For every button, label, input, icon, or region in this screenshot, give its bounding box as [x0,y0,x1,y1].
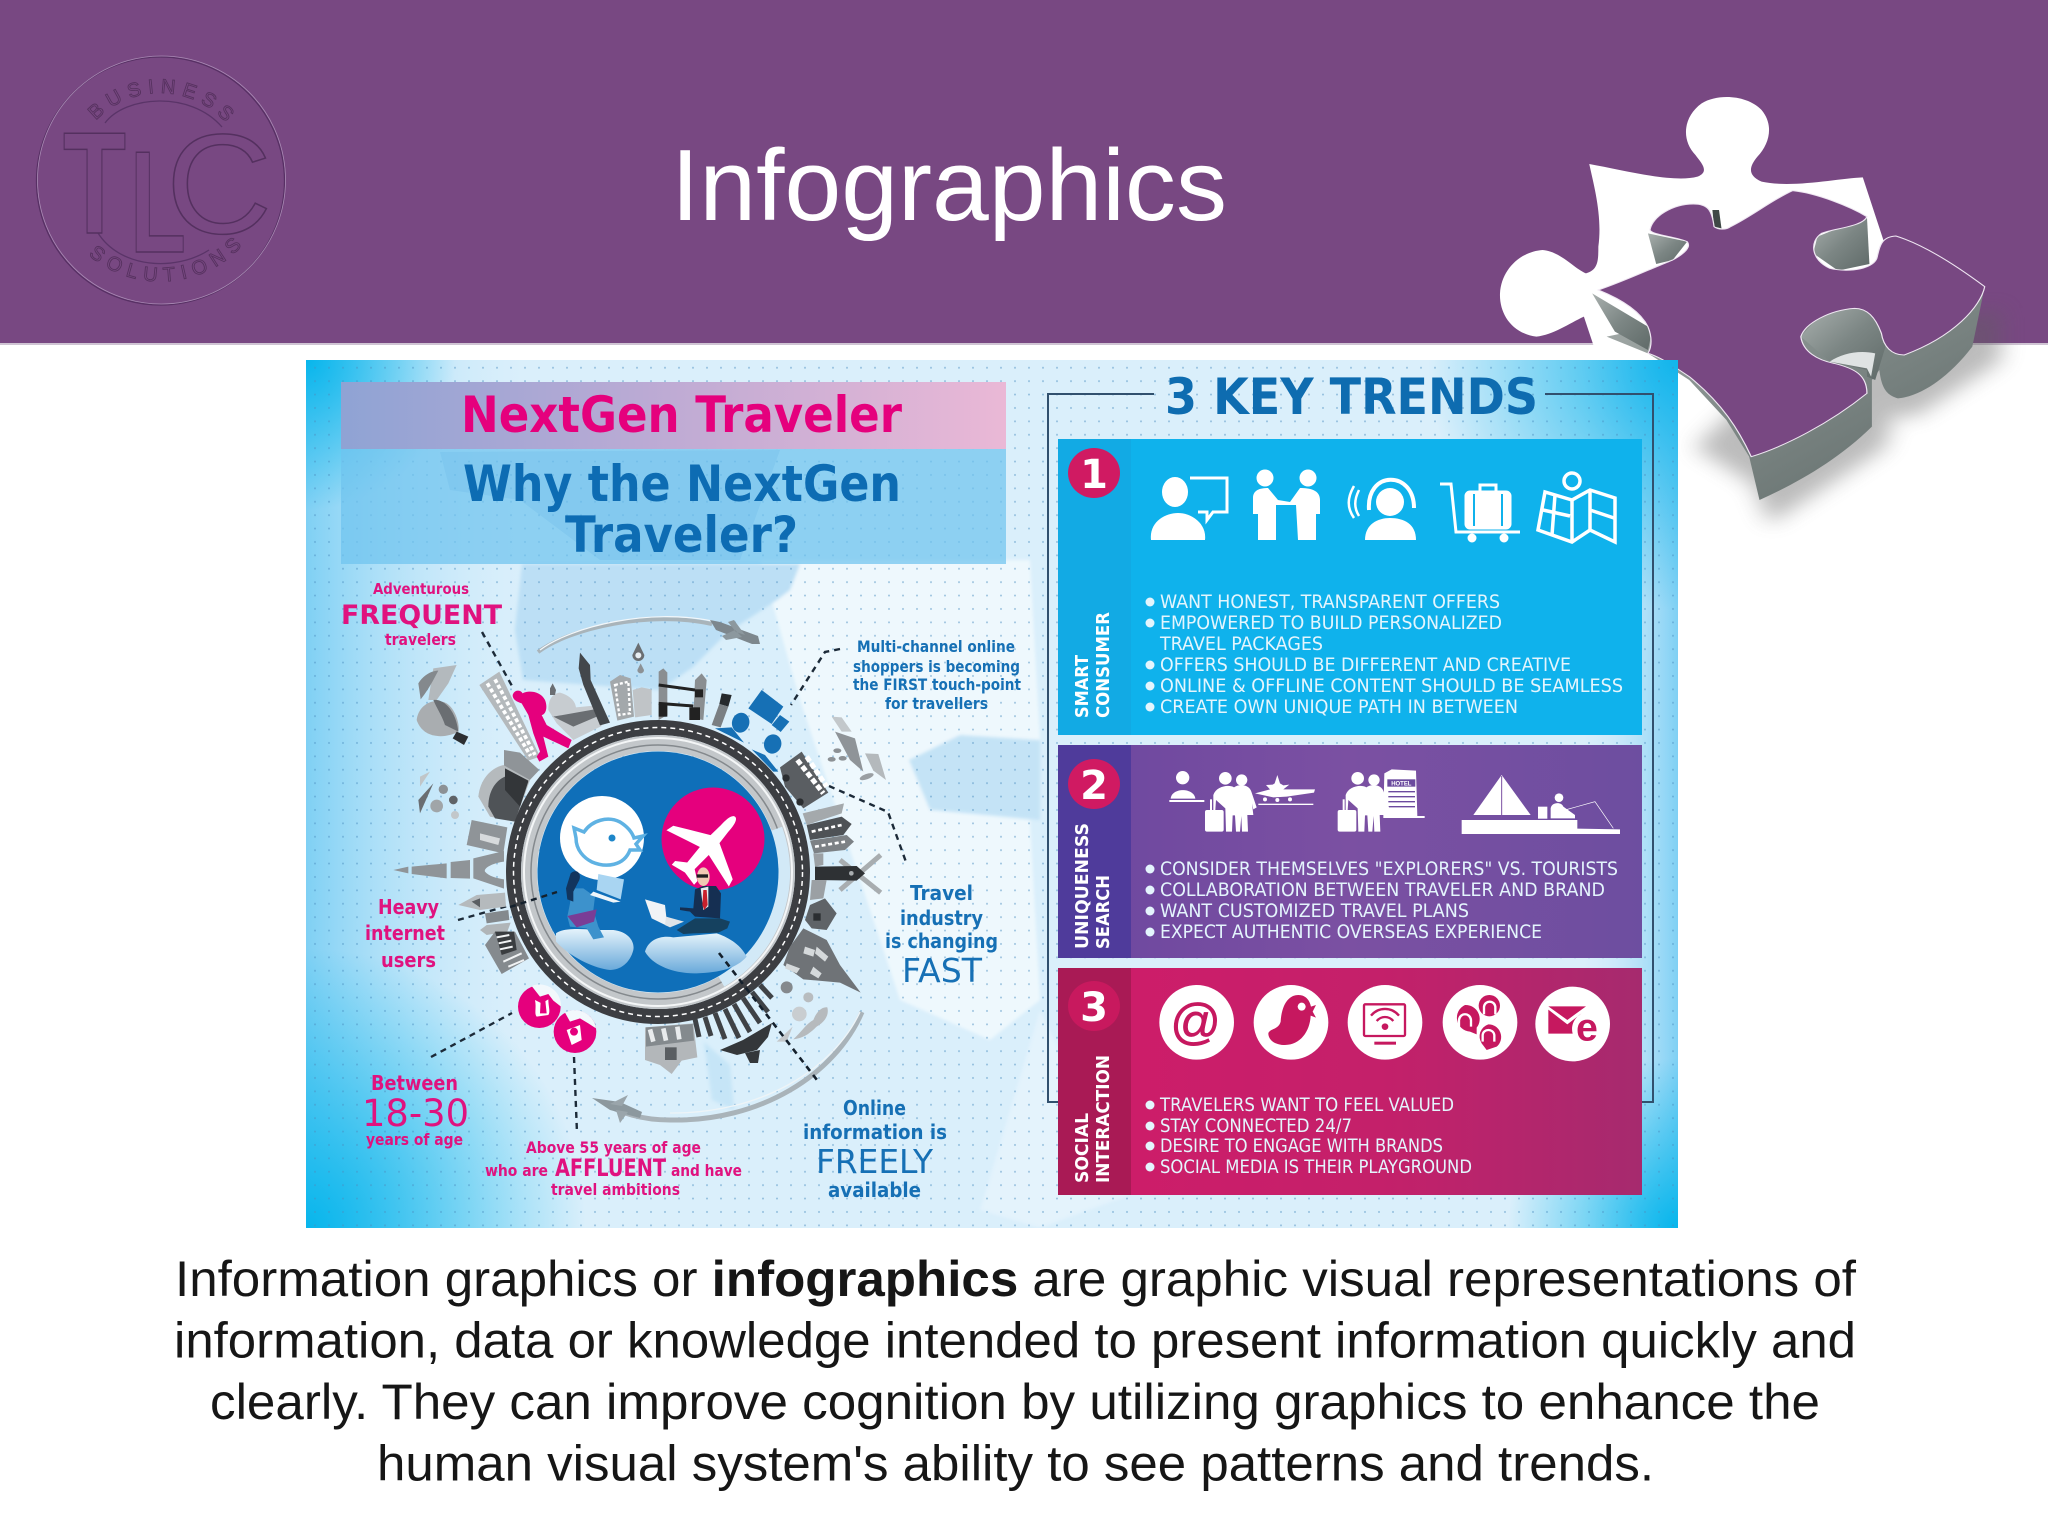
icon: tent and fisher [1462,775,1620,834]
landmark: bicycle and tower [810,853,827,900]
landmark: spire house [458,893,506,910]
woman body [567,888,604,939]
bird circle [560,796,644,880]
skyline lower left [393,851,529,974]
bullet list [1146,858,1618,943]
bullet list: ONLINE & OFFLINE CONTENT SHOULD BE SEAMLESS [1160,675,1623,697]
callout: Above 55 affluent: travel ambitions [551,1180,680,1199]
man head [697,867,710,886]
callout: Adventurous FREQUENT travelers [343,582,502,645]
heading band: Why the NextGen Traveler [341,449,1006,564]
callout: Above 55 affluent: Above 55 years of age [526,1138,701,1157]
panel 1: smart consumer [1058,439,1642,735]
heading band: NextGen Traveler [341,382,1006,449]
panel 2: uniqueness search [1058,745,1642,958]
title: Infographics [671,130,1227,242]
bullet list: TRAVELERS WANT TO FEEL VALUED [1159,1094,1454,1116]
trend 2 icon row [1169,769,1620,834]
header band [0,0,2048,345]
callout: Adventurous FREQUENT travelers: Adventurous [373,580,469,598]
vertical label [1072,823,1114,949]
heading: 3 key trends: 3 KEY TRENDS [1165,368,1538,426]
heading band: Why the NextGen Traveler: Traveler? [565,506,798,564]
bullet list: CREATE OWN UNIQUE PATH IN BETWEEN [1160,696,1518,718]
dot texture [306,360,1678,1228]
callout: Above 55 affluent: who are [485,1161,548,1180]
number badge 2 [1068,759,1120,809]
man glasses [697,874,708,878]
callout: Online information is FREELY available: FREELY [816,1142,934,1181]
lower plane arc [592,1012,862,1123]
callout: Online information is FREELY available: information is [803,1120,947,1144]
callout: multi-channel shoppers [853,637,1021,713]
man legs [677,918,730,934]
body text [174,1251,1856,1492]
bullet list: WANT CUSTOMIZED TRAVEL PLANS [1160,900,1469,922]
landmark: arch [467,820,507,853]
woman with laptop on cloud [556,871,634,970]
leader line to woman [510,892,557,907]
number badge 2: 2 [1080,763,1108,809]
bullet list: COLLABORATION BETWEEN TRAVELER AND BRAND [1160,879,1605,901]
landmark: leaning tower [479,672,540,761]
icon: headset agent [1349,480,1416,540]
hiker [513,691,572,762]
grey clouds right [828,717,886,782]
callout: Online information is FREELY available: Online [843,1096,906,1120]
stadium base detail [745,1050,760,1063]
right cloud [645,933,747,973]
heading band: Why the NextGen Traveler: Why the NextGen [463,455,901,513]
grey flowers and clouds [777,981,828,1042]
landmark: tower bridge [659,668,707,720]
man shirt and tie [701,887,708,910]
callout: Between 18-30 years of age: Between [371,1071,458,1095]
white area visible in the inner notch [1830,352,1875,377]
body text: information, data or knowledge intended to present information quickly and [174,1312,1856,1368]
callout: Heavy internet users: users [381,948,436,972]
bullet list: SOCIAL MEDIA IS THEIR PLAYGROUND [1160,1156,1472,1178]
logo: TLC Business Solutions emblem: C [166,105,272,264]
icon: blue chat figures [715,690,789,772]
skyline upper right [659,668,886,853]
vertical label [1072,612,1114,718]
callout: Adventurous FREQUENT travelers: travelers [385,630,456,649]
number badge 1: 1 [1080,452,1108,498]
callout: Heavy internet users: internet [365,921,445,945]
landmark: colosseum [478,765,530,822]
landmark: stadium stripes [695,985,772,1055]
callout: Online information is FREELY available: available [828,1178,921,1202]
number badge 3 [1068,981,1120,1031]
callout: Above 55 affluent [486,1141,742,1195]
landmark: lipstick tower [712,693,732,727]
left cloud [556,929,634,970]
logo: TLC Business Solutions emblem [36,56,286,306]
woman hair [566,871,580,902]
logo: TLC Business Solutions emblem: T [63,102,126,264]
callout: Between 18-30 years of age [366,1075,467,1148]
icon: handshake [1253,470,1320,540]
leader line over the globe [719,953,817,1080]
icon: wifi monitor [1348,985,1422,1060]
grey clouds left [418,772,459,819]
body text: Information graphics or infographics are graphic visual representations of [175,1251,1856,1307]
landmark: cottage [805,898,837,930]
landmark: domed cathedral [548,683,602,740]
icon: at sign: @ [1170,994,1221,1050]
callout: Above 55 affluent: AFFLUENT [555,1154,667,1182]
grey clouds upper left [418,665,457,700]
icon: couple with hotel: HOTEL [1391,781,1412,787]
icon: couple with hotel [1338,769,1425,832]
icon: bird [1254,985,1328,1060]
vertical label: INTERACTION [1093,1055,1114,1183]
callout: Heavy internet users [366,899,445,968]
bullet list [1146,591,1623,718]
infographic panel [306,360,1678,1228]
bullet list: STAY CONNECTED 24/7 [1160,1115,1352,1137]
laptop [590,874,624,903]
callout: Above 55 affluent: and have [671,1161,742,1180]
callout: multi-channel shoppers: shoppers is becoming [853,657,1020,676]
upper plane arc [538,617,760,652]
puzzle hole [1500,97,1886,360]
vertical label: CONSUMER [1093,612,1114,718]
callout: multi-channel shoppers: for travellers [885,694,988,713]
logo: TLC Business Solutions emblem: SOLUTIONS [90,238,240,282]
logo: TLC Business Solutions emblem: L [130,121,186,283]
dashed leader lines [431,632,906,1133]
panel 3: social interaction [1058,968,1642,1195]
callout: Online information is FREELY available [803,1096,947,1202]
puzzle inner walls [1592,210,1886,380]
puzzle shadow [1695,307,2001,524]
vertical label: SEARCH [1093,875,1114,949]
icon: desk agent [1169,771,1204,802]
callout: Between 18-30 years of age: 18-30 [362,1092,469,1135]
icon: email [1535,987,1610,1061]
landmark: windmill [815,855,881,893]
face two [554,1010,596,1053]
landmark: tower house [504,750,539,782]
icon: airplane [1255,775,1315,805]
landmark: small houses [480,910,511,935]
callout: Travel industry is changing FAST: Travel [910,881,973,905]
callout: Between 18-30 years of age: years of age [366,1130,463,1149]
bullet list: CONSIDER THEMSELVES "EXPLORERS" VS. TOURISTS [1160,858,1618,880]
vertical label [1072,1055,1114,1183]
woman skirt [567,909,597,927]
callout: Travel industry is changing FAST: industry [900,906,983,930]
bullet list: TRAVEL PACKAGES [1159,633,1323,655]
icon: luggage cart [1440,484,1520,541]
landmark: eiffel tower [393,851,504,889]
world map shapes [515,560,1130,1228]
callout: Travel industry is changing FAST [886,884,997,982]
trend 3 icon row [1159,985,1610,1061]
callout: Travel industry is changing FAST: is changing [885,929,998,953]
bullet list: WANT HONEST, TRANSPARENT OFFERS [1160,591,1500,613]
icon: at sign [1159,985,1234,1060]
icon: people group [1443,985,1517,1060]
landmark: houses [610,675,652,721]
landmark: office block [485,932,529,974]
globe centre [538,752,778,992]
icon: map with pin [1538,473,1615,542]
body text: human visual system's ability to see patterns and trends. [377,1436,1654,1492]
landmark: canal houses [803,803,854,853]
bullet list: EXPECT AUTHENTIC OVERSEAS EXPERIENCE [1160,921,1542,943]
logo: TLC Business Solutions emblem: BUSINESS [87,78,234,120]
puzzle top face [1598,191,1985,457]
trends frame [1048,394,1653,1102]
callout: Adventurous FREQUENT travelers: FREQUENT [341,600,503,631]
age group faces [518,984,596,1053]
white laptop [645,899,684,927]
callout: Heavy internet users: Heavy [378,895,439,919]
globe rings [514,728,802,1016]
icon: person with speech bubble [1151,477,1227,540]
man with laptop on cloud [645,867,747,973]
bullet list: EMPOWERED TO BUILD PERSONALIZED [1160,612,1502,634]
landmark: bottom house [645,1023,697,1074]
vertical label: SMART [1072,654,1093,718]
landmark: clock tower [579,653,610,725]
body text: clearly. They can improve cognition by utilizing graphics to enhance the [210,1374,1820,1430]
bullet list [1146,1094,1472,1178]
callout: multi-channel shoppers: the FIRST touch-point [853,675,1021,694]
landmark: double-decker bus [780,752,828,808]
plane circle [652,788,766,903]
skyline lower right [645,853,881,1074]
icon: couple with luggage [1205,772,1257,832]
callout: Travel industry is changing FAST: FAST [902,951,983,990]
bullet list: DESIRE TO ENGAGE WITH BRANDS [1160,1135,1443,1157]
face one [518,984,561,1028]
number badge 1 [1068,448,1120,498]
landmark: cathedral [783,928,861,993]
icon: email: e [1576,1005,1598,1049]
bullet list: OFFERS SHOULD BE DIFFERENT AND CREATIVE [1160,654,1571,676]
map pin marker [632,643,644,673]
puzzle walls [1607,287,1985,500]
hot-air balloon [417,700,468,745]
puzzle piece with cut-out hole [1500,97,2001,524]
heading band: NextGen Traveler: NextGen Traveler [461,386,902,444]
vertical label: UNIQUENESS [1072,823,1093,949]
vertical label: SOCIAL [1072,1113,1093,1183]
infographic background [306,360,1678,1228]
man suit [680,886,721,918]
callout: multi-channel shoppers: Multi-channel online [857,637,1015,656]
number badge 3: 3 [1080,985,1108,1031]
skyline upper left [417,643,652,853]
